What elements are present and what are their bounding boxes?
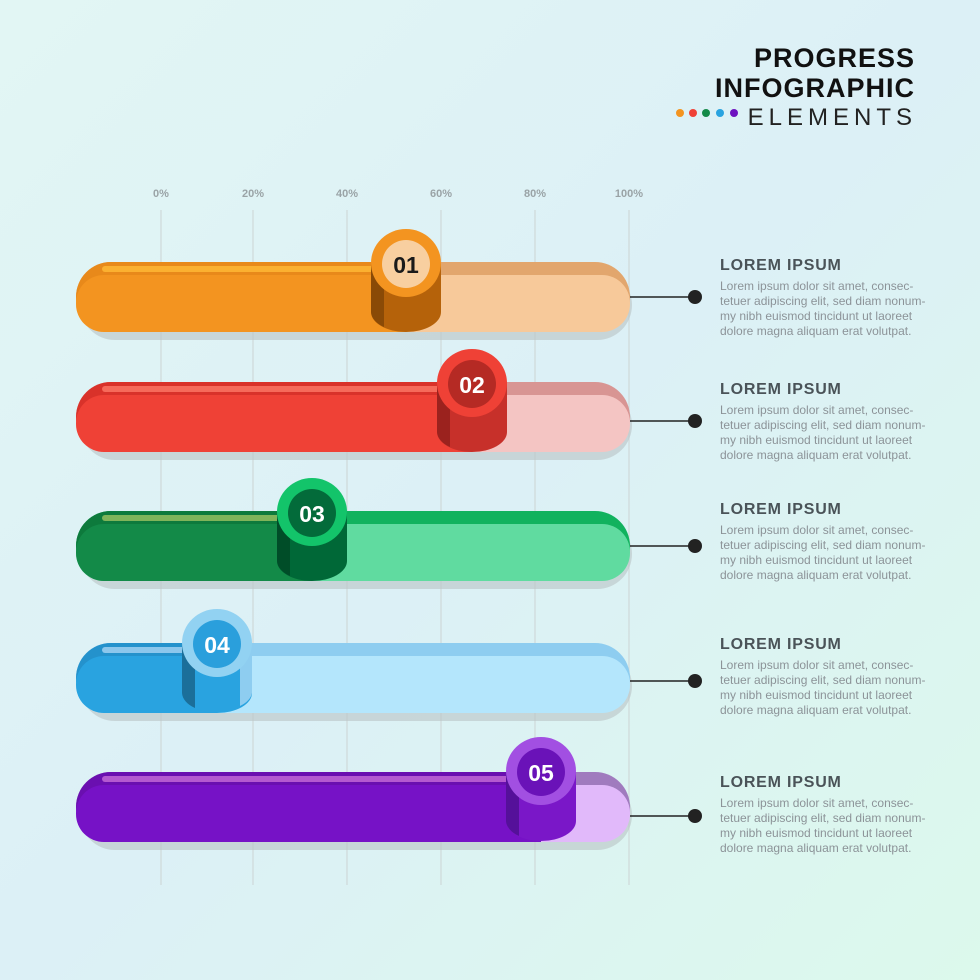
text 3: dolore magna aliquam erat volutpat. (720, 568, 911, 582)
title: PROGRESS (754, 43, 915, 73)
marker 04 (182, 609, 252, 713)
connector 3 (630, 539, 702, 553)
axis labels: 80% (524, 188, 546, 200)
text 3: my nibh euismod tincidunt ut laoreet (720, 553, 913, 567)
title (676, 43, 917, 131)
marker 05: 05 (528, 760, 554, 786)
text 4: Lorem ipsum dolor sit amet, consec- (720, 658, 913, 672)
marker 05 (506, 737, 576, 841)
text 2: Lorem ipsum dolor sit amet, consec- (720, 403, 913, 417)
text 5: my nibh euismod tincidunt ut laoreet (720, 826, 913, 840)
bar 2 (76, 349, 632, 460)
bar 3 (76, 478, 632, 589)
text 4: my nibh euismod tincidunt ut laoreet (720, 688, 913, 702)
axis labels: 20% (242, 188, 264, 200)
marker 02: 02 (459, 372, 485, 398)
text 3: LOREM IPSUM (720, 501, 842, 518)
text 2: LOREM IPSUM (720, 381, 842, 398)
text 2: tetuer adipiscing elit, sed diam nonum- (720, 418, 925, 432)
connector 4 (630, 674, 702, 688)
text 1: LOREM IPSUM (720, 257, 842, 274)
text 5: Lorem ipsum dolor sit amet, consec- (720, 796, 913, 810)
text 3: tetuer adipiscing elit, sed diam nonum- (720, 538, 925, 552)
bar 5 (76, 737, 632, 850)
text 5: tetuer adipiscing elit, sed diam nonum- (720, 811, 925, 825)
text 5: dolore magna aliquam erat volutpat. (720, 841, 911, 855)
connector 1 (630, 290, 702, 304)
text 2: dolore magna aliquam erat volutpat. (720, 448, 911, 462)
axis labels: 100% (615, 188, 643, 200)
text 1: my nibh euismod tincidunt ut laoreet (720, 309, 913, 323)
text 2 (720, 381, 925, 462)
connector 2 (630, 414, 702, 428)
text 5: LOREM IPSUM (720, 774, 842, 791)
text 4 (720, 636, 925, 717)
text 2: my nibh euismod tincidunt ut laoreet (720, 433, 913, 447)
text 1: tetuer adipiscing elit, sed diam nonum- (720, 294, 925, 308)
axis labels: 0% (153, 188, 169, 200)
text 5 (720, 774, 925, 855)
title: ELEMENTS (748, 104, 917, 131)
axis labels: 40% (336, 188, 358, 200)
text 4: dolore magna aliquam erat volutpat. (720, 703, 911, 717)
text 4: tetuer adipiscing elit, sed diam nonum- (720, 673, 925, 687)
text 1: dolore magna aliquam erat volutpat. (720, 324, 911, 338)
text 4: LOREM IPSUM (720, 636, 842, 653)
marker 03: 03 (299, 501, 325, 527)
marker 04: 04 (204, 632, 230, 658)
text 3 (720, 501, 925, 582)
marker 02 (437, 349, 507, 452)
connector 5 (630, 809, 702, 823)
marker 01: 01 (393, 252, 419, 278)
axis labels (153, 188, 643, 200)
title: INFOGRAPHIC (715, 73, 915, 103)
bar 4 (76, 609, 632, 721)
text 3: Lorem ipsum dolor sit amet, consec- (720, 523, 913, 537)
marker 01 (371, 229, 441, 332)
axis labels: 60% (430, 188, 452, 200)
marker 03 (277, 478, 347, 581)
bar 1 (76, 229, 632, 340)
text 1: Lorem ipsum dolor sit amet, consec- (720, 279, 913, 293)
text 1 (720, 257, 925, 338)
